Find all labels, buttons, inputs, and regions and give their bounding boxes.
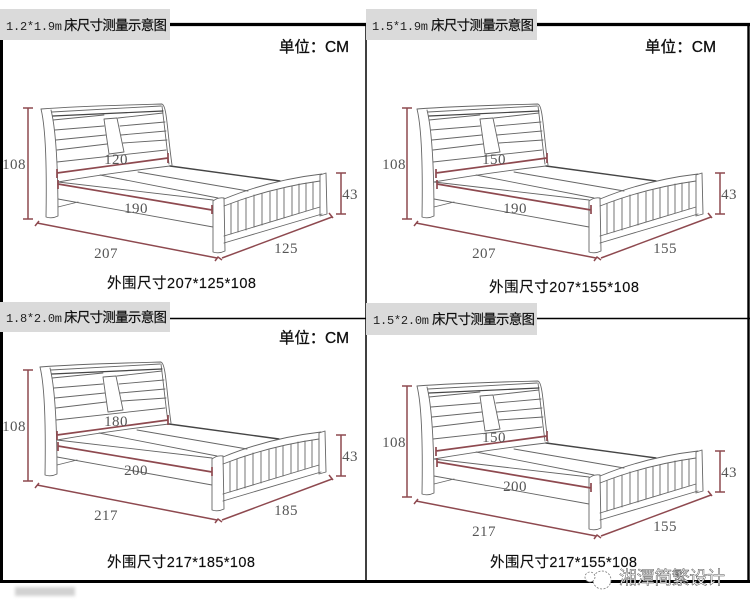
bed drawing [417,381,703,530]
dimension lines and numbers: 200 [124,463,148,479]
heading tag: 1.8*2.0m [0,302,170,332]
panel: 1.5×2.0m bed [366,303,737,571]
dimension lines and numbers: 207 [472,246,496,262]
heading tag: 1.5*2.0m [366,303,537,335]
dimension lines and numbers: 150 [482,152,506,168]
watermark text: 湘潭简繁设计 [619,568,725,588]
dimension lines and numbers: 43 [721,465,737,481]
dimension lines and numbers: 217 [94,508,118,524]
heading tag: 1.8*2.0m: 床尺寸测量示意图 [64,309,167,325]
dimension lines and numbers: 190 [503,201,527,217]
dimension lines and numbers [382,108,737,262]
unit label: 单位：CM [279,38,349,56]
dimension lines and numbers: 207 [94,246,118,262]
outer size text: 外围尺寸207*155*108 [489,279,639,296]
heading tag: 1.5*2.0m: 1.5*2.0m [373,314,429,328]
outer size text: 外围尺寸207*125*108 [107,275,256,292]
panel: 1.8×2.0m bed [0,302,358,571]
dimension lines and numbers [2,370,358,524]
dimension lines and numbers: 155 [653,519,677,535]
panel: 1.5×1.9m bed [366,9,737,296]
dimension lines and numbers: 108 [2,419,26,435]
dimension lines and numbers: 217 [472,524,496,540]
dimension lines and numbers: 43 [342,187,358,203]
unit label: 单位：CM [645,38,716,56]
heading tag: 1.5*1.9m: 1.5*1.9m [372,20,428,34]
dimension lines and numbers: 120 [104,152,128,168]
dimension lines and numbers: 108 [382,435,406,451]
dimension lines and numbers: 43 [721,187,737,203]
heading tag: 1.2*1.9m: 1.2*1.9m [6,20,62,34]
heading tag: 1.8*2.0m: 1.8*2.0m [6,312,62,326]
dimension lines and numbers: 125 [274,241,298,257]
icon: chat watermark [585,571,611,589]
heading tag: 1.5*2.0m: 床尺寸测量示意图 [432,311,535,327]
bed drawing [41,104,327,253]
heading tag: 1.2*1.9m [0,9,170,40]
dimension lines and numbers: 180 [104,414,128,430]
bed drawing [40,362,326,511]
dimension lines and numbers: 150 [482,430,506,446]
dimension lines and numbers [382,386,737,540]
outer size text: 外围尺寸217*155*108 [490,554,637,571]
dimension lines and numbers: 190 [124,201,148,217]
bed drawing [417,104,703,253]
panel: 1.2×1.9m bed [0,9,358,292]
dimension lines and numbers: 185 [274,503,298,519]
dimension lines and numbers: 155 [653,241,677,257]
outer size text: 外围尺寸217*185*108 [107,554,255,571]
heading tag: 1.2*1.9m: 床尺寸测量示意图 [64,17,167,33]
dimension lines and numbers: 200 [503,479,527,495]
dimension lines and numbers: 108 [382,157,406,173]
dimension lines and numbers: 108 [2,157,26,173]
unit label: 单位：CM [279,329,349,347]
heading tag: 1.5*1.9m: 床尺寸测量示意图 [431,17,534,33]
dimension lines and numbers: 43 [342,449,358,465]
blurred source mark, bottom left [15,587,75,596]
heading tag: 1.5*1.9m [366,9,537,40]
dimension lines and numbers [2,108,358,262]
